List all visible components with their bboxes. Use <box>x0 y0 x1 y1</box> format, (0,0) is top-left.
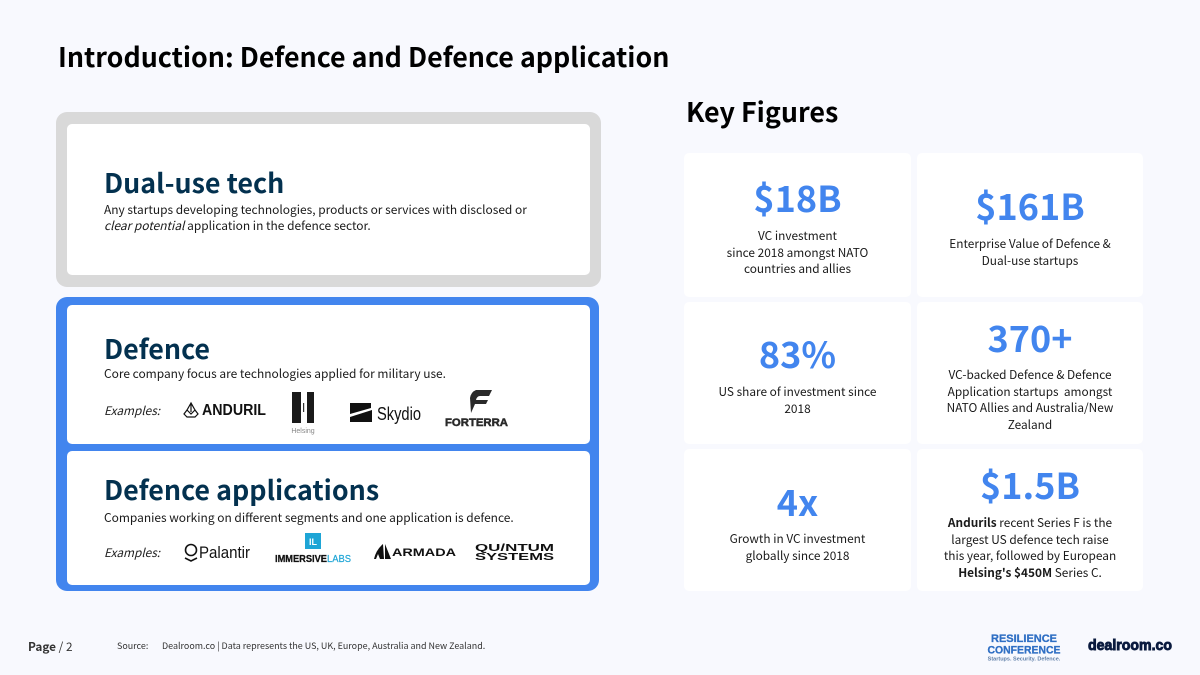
stat label: largest US defence tech raise <box>951 530 1109 548</box>
stat card: 370+ <box>917 302 1143 444</box>
stat label: Zealand <box>1008 416 1052 432</box>
logo: Forterra: FORTERRA <box>445 417 508 429</box>
logo: Dealroom: dealroom.co <box>1088 637 1172 654</box>
defence description: Core company focus are technologies applied for military use. <box>104 365 446 382</box>
logo: Immersive Labs: LABS <box>327 553 351 565</box>
stat label: VC-backed Defence & Defence <box>948 366 1112 383</box>
stat label: Dual-use startups <box>982 252 1078 268</box>
stat label: globally since 2018 <box>746 546 849 564</box>
stat label: NATO Allies and Australia/New <box>947 399 1113 416</box>
stat card: $161B <box>917 153 1143 297</box>
stat label: Application startups amongst <box>948 382 1112 400</box>
defence applications heading: Defence applications <box>104 469 379 508</box>
logo: Helsing <box>291 392 315 435</box>
logo: Resilience Conference <box>988 633 1061 662</box>
defence card <box>67 305 590 444</box>
stat value: 370+ <box>988 311 1072 363</box>
stat value: $18B <box>753 171 842 223</box>
stat label <box>944 514 1116 580</box>
source note <box>117 639 485 652</box>
logo: Armada <box>374 544 456 559</box>
defence applications description: Companies working on different segments and one application is defence. <box>104 509 514 526</box>
stat label <box>727 227 868 277</box>
key figures heading: Key Figures <box>686 91 838 130</box>
stat label: Enterprise Value of Defence & <box>949 235 1111 252</box>
dual-use card <box>67 124 590 275</box>
stat value: 83% <box>759 327 836 379</box>
stat label: Growth in VC investment <box>730 530 865 547</box>
stat label: 2018 <box>784 400 811 416</box>
logo: Resilience Conference: Startups. Security. Defence. <box>988 656 1061 662</box>
dual-use description: clear potential application in the defence sector. <box>104 217 371 234</box>
panel: dual-use tech <box>56 112 601 287</box>
logo: Anduril: ANDURIL <box>202 402 266 419</box>
stat label <box>718 383 876 416</box>
stat card: $18B <box>684 153 911 297</box>
logo: Forterra <box>445 390 508 429</box>
logo: Resilience Conference: RESILIENCE <box>991 633 1057 645</box>
defence examples label: Examples: <box>104 402 160 419</box>
logo: Resilience Conference: CONFERENCE <box>988 644 1060 656</box>
stat label: Helsing's $450M Series C. <box>958 564 1102 580</box>
page number: Page / 2 <box>28 638 72 655</box>
defence heading: Defence <box>104 328 210 367</box>
stat label <box>947 366 1113 432</box>
stat label: this year, followed by European <box>944 547 1116 564</box>
stat card: $1.5B <box>917 449 1143 591</box>
stat value: $161B <box>975 179 1085 231</box>
dual-use description: Any startups developing technologies, products or services with disclosed or <box>104 201 527 218</box>
logo: Quantum Systems <box>475 543 555 562</box>
stat card: 4x <box>684 449 911 591</box>
panel: defence group <box>56 297 599 591</box>
text: Dealroom.co | Data represents the US, UK, Europe, Australia and New Zealand. <box>162 639 485 652</box>
stat value: $1.5B <box>980 458 1080 510</box>
logo: Helsing: Helsing <box>291 428 315 435</box>
dual-use description <box>104 201 527 234</box>
stat value: 4x <box>777 475 818 527</box>
stat label: VC investment <box>758 227 837 244</box>
logo: Skydio <box>350 403 421 424</box>
stat label: Andurils recent Series F is the <box>948 514 1112 531</box>
logo: Armada: ARMADA <box>392 547 456 559</box>
source note: Source: <box>117 639 148 652</box>
logo: Immersive Labs: IMMERSIVE <box>275 553 327 565</box>
stat label: countries and allies <box>744 260 851 277</box>
logo: Quantum Systems: QU/NTUM <box>475 543 554 554</box>
stat label <box>730 530 866 564</box>
defence applications examples label: Examples: <box>104 544 160 561</box>
defence applications card <box>67 451 590 585</box>
stat label: US share of investment since <box>718 383 876 400</box>
stat label: since 2018 amongst NATO <box>727 244 868 260</box>
logo: Immersive Labs: IL <box>309 537 318 547</box>
dual-use heading: Dual-use tech <box>104 162 284 201</box>
stat label <box>949 235 1111 268</box>
logo: Immersive Labs <box>275 533 351 565</box>
stat card: 83% <box>684 302 911 444</box>
title: Introduction: Defence and Defence application <box>58 36 669 75</box>
